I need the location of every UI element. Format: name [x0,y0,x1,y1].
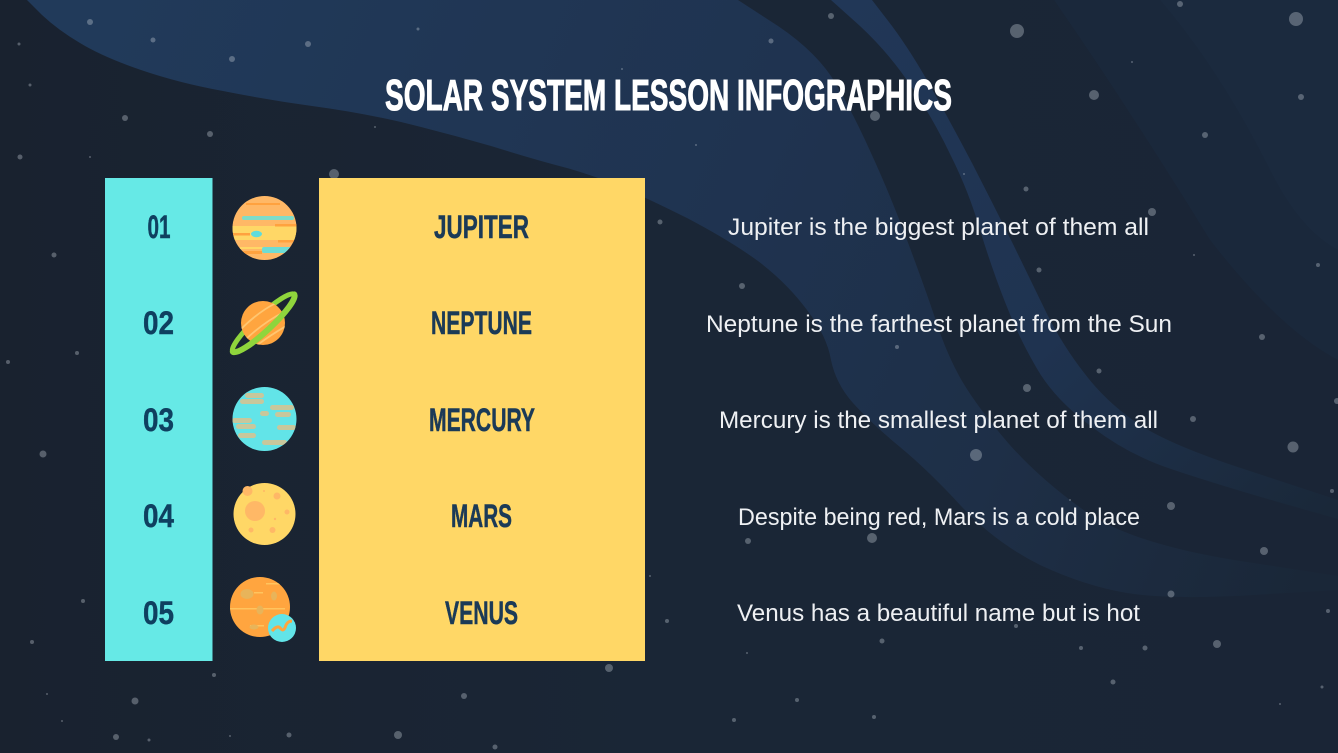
number 05: 05 [143,595,174,631]
panel: planet names [319,178,645,661]
description: venus: Venus has a beautiful name but is hot [737,600,1140,627]
description: jupiter: Jupiter is the biggest planet of them all [728,214,1149,241]
description: mars: Despite being red, Mars is a cold place [738,504,1140,531]
icon: neptune ringed planet [230,291,298,356]
description: mercury: Mercury is the smallest planet of them all [719,407,1158,434]
name: mars: MARS [451,498,512,534]
name: venus: VENUS [445,595,518,631]
icon: mercury planet [232,387,296,451]
icon: venus planet with moon [230,577,296,642]
name: jupiter: JUPITER [434,209,529,245]
number 01: 01 [148,209,170,245]
panel: numbers [105,178,212,661]
number 03: 03 [143,402,174,438]
number 04: 04 [143,498,174,534]
name: neptune: NEPTUNE [431,305,532,341]
text block: descriptions [706,214,1172,627]
icon: jupiter planet [232,196,298,260]
title: SOLAR SYSTEM LESSON INFOGRAPHICS [385,71,952,120]
number 02: 02 [143,305,174,341]
icon: mars planet [234,483,296,545]
description: neptune: Neptune is the farthest planet from the Sun [706,311,1172,338]
name: mercury: MERCURY [429,402,535,438]
